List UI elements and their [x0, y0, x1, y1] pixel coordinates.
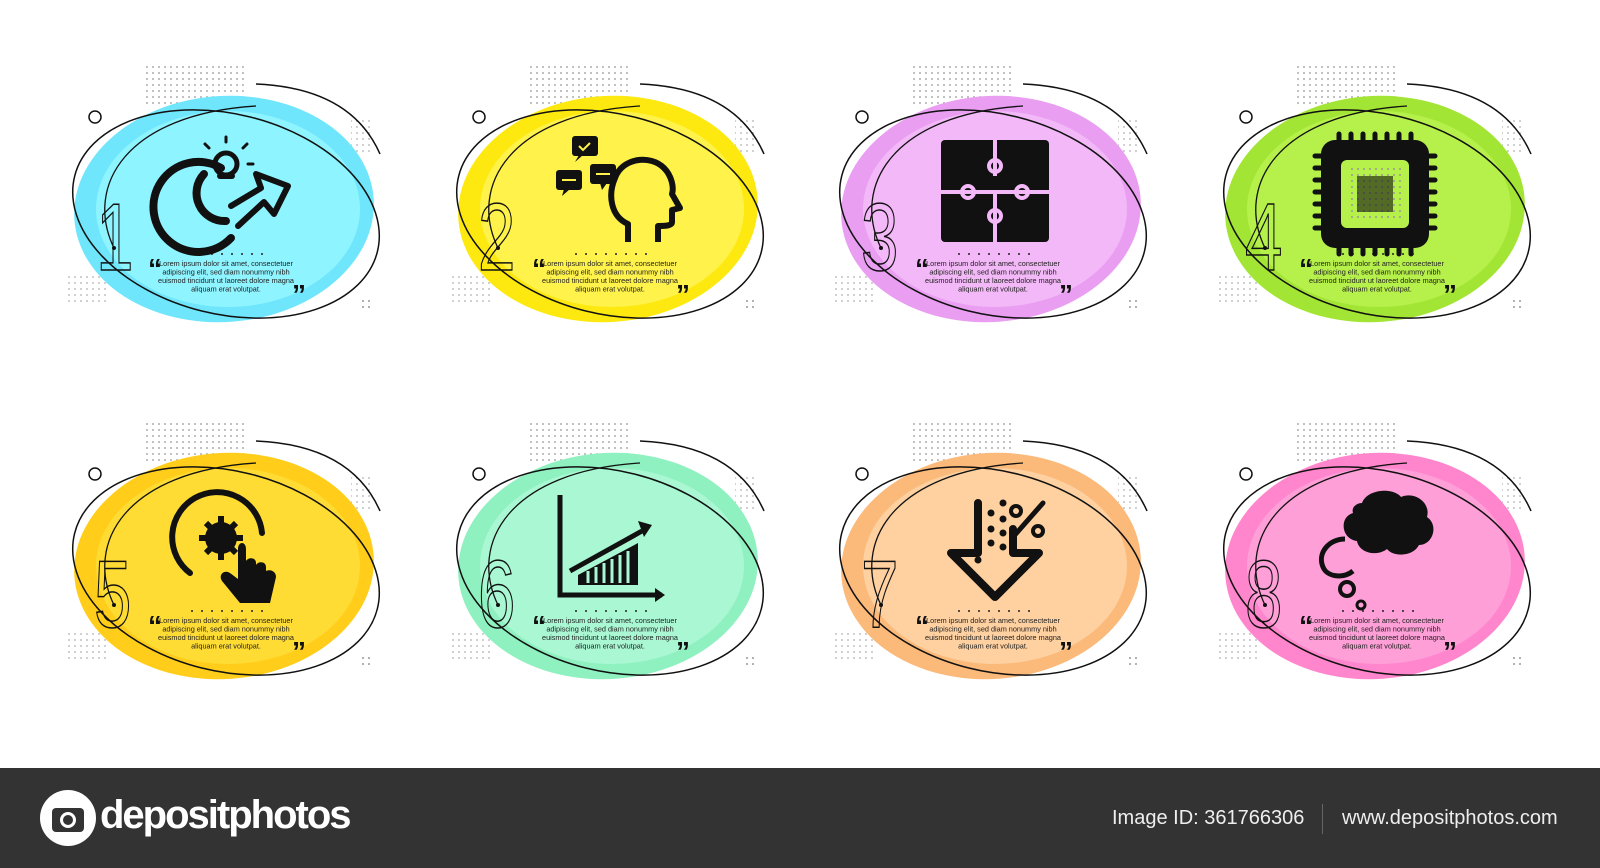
card 4: chip — [1201, 64, 1553, 349]
icon: processor chip — [1315, 134, 1435, 254]
logo: depositphotos — [100, 793, 350, 837]
number 3: 3 — [861, 183, 898, 291]
card 2: messages head — [434, 64, 786, 349]
icon: head with chat — [556, 136, 680, 242]
icon: idea arrow — [153, 137, 288, 252]
number 6: 6 — [478, 540, 515, 648]
card 8: thought bubble — [1201, 421, 1553, 706]
icon: growth chart — [560, 495, 665, 602]
number 8: 8 — [1245, 540, 1282, 648]
card 7: percent down — [817, 421, 1169, 706]
icon: camera logo — [40, 790, 96, 846]
number 5: 5 — [94, 540, 131, 648]
number 1: 1 — [96, 183, 133, 291]
icon: speech bubble — [1321, 491, 1433, 609]
number 4: 4 — [1245, 183, 1282, 291]
image id: Image ID: 361766306 — [1112, 807, 1304, 829]
icon: gear with hand — [172, 492, 276, 603]
footer bar — [0, 768, 1600, 868]
card 5: settings click — [50, 421, 402, 706]
icon: loan percent arrow — [951, 500, 1043, 597]
card 3: puzzle — [817, 64, 1169, 349]
url: www.depositphotos.com — [1342, 807, 1558, 829]
icon: puzzle — [941, 140, 1049, 242]
card 1: idea — [50, 64, 402, 349]
number 7: 7 — [861, 540, 898, 648]
number 2: 2 — [478, 183, 515, 291]
logo — [40, 790, 350, 846]
card 6: chart — [434, 421, 786, 706]
